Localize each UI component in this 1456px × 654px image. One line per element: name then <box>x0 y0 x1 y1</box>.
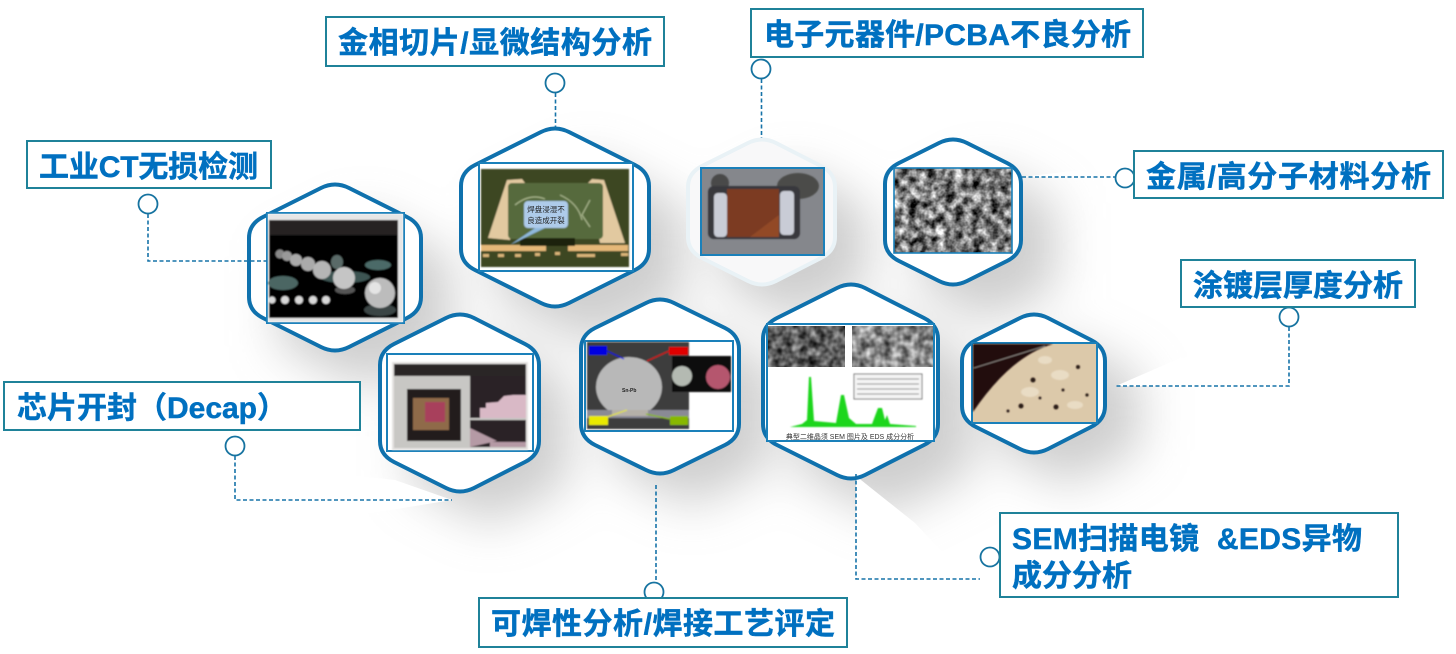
connector lines <box>148 79 1289 582</box>
hexagon: metal and polymer materials <box>885 140 1021 284</box>
label: decap <box>4 382 360 430</box>
image callout text: 焊盘浸湿不 <box>527 204 565 214</box>
label: industrial CT <box>27 141 271 188</box>
hexagon: solderability <box>581 300 739 474</box>
image: SEM micrograph <box>894 168 1012 253</box>
image caption: Sn-Pb <box>622 388 636 394</box>
image: capacitor <box>701 168 824 255</box>
label: SEM EDS: SEM扫描电镜 &EDS异物 <box>1012 523 1362 556</box>
image: coating cross-section <box>972 343 1097 423</box>
label: solderability <box>479 598 847 647</box>
hexagon: SEM and EDS <box>763 284 938 478</box>
image: CT solder balls <box>267 213 404 323</box>
soft background shadows <box>279 160 1140 524</box>
hexagon: industrial CT <box>249 184 421 350</box>
hexagon: coating thickness <box>962 314 1105 452</box>
hexagon: decap <box>380 314 539 492</box>
light wedges cutting the shadow <box>300 170 1300 654</box>
label: industrial CT: 工业CT无损检测 <box>39 151 258 184</box>
label: components <box>751 9 1143 57</box>
image: solder pad cross-section <box>479 163 633 271</box>
label: components: 电子元器件/PCBA不良分析 <box>764 19 1131 52</box>
label: metallography: 金相切片/显微结构分析 <box>338 27 652 60</box>
label: materials: 金属/高分子材料分析 <box>1146 161 1431 194</box>
label: metallography <box>326 17 664 66</box>
image: solder joint <box>585 341 733 431</box>
hexagon: metallographic section <box>461 128 649 306</box>
label: coating <box>1181 260 1415 307</box>
image: decapsulated chip <box>387 354 533 451</box>
label: decap: 芯片开封（Decap） <box>17 392 287 425</box>
label: SEM EDS <box>1000 513 1398 597</box>
spectrum caption: 典型二维晶须 SEM 图片及 EDS 成分分析 <box>786 432 914 441</box>
label: coating: 涂镀层厚度分析 <box>1193 270 1403 303</box>
label: materials <box>1134 151 1443 198</box>
image callout text: 良造成开裂 <box>527 215 565 225</box>
image: SEM with EDS spectrum <box>767 324 934 441</box>
connector dots <box>138 60 1298 602</box>
label: SEM EDS: 成分分析 <box>1012 560 1132 593</box>
hexagon: electronic components (pale) <box>688 140 835 284</box>
label: solderability: 可焊性分析/焊接工艺评定 <box>491 608 835 641</box>
